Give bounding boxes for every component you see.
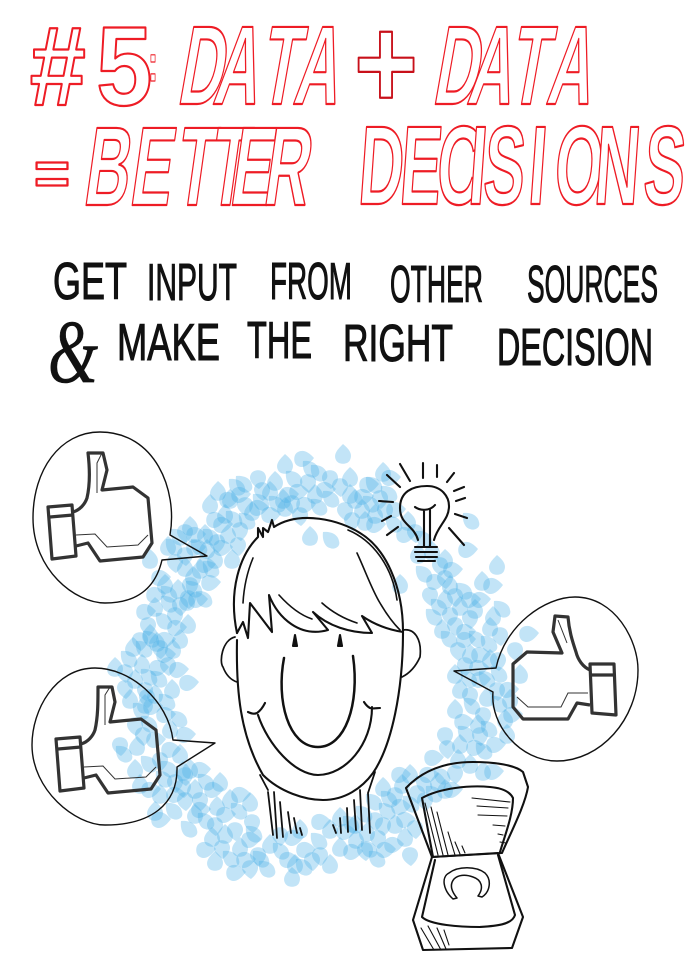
base (413, 853, 523, 950)
title line 1: #5: DATA + DATA: #5 (30, 4, 152, 129)
title line 1: #5: DATA + DATA: : (148, 35, 158, 93)
base logo (444, 868, 489, 899)
collar (260, 772, 375, 838)
subheading line 2 (48, 303, 653, 402)
subheading line 2: RIGHT (343, 315, 453, 373)
mouth (282, 656, 355, 747)
blue petal halo (107, 444, 539, 887)
speech bubble: right thumbs up (454, 597, 638, 761)
subheading line 1: INPUT (147, 254, 237, 312)
subheading line 2: THE (247, 312, 312, 370)
hatching (425, 798, 510, 855)
subheading line 1: OTHER (390, 256, 483, 314)
subheading line 1: GET (53, 253, 127, 311)
head outline (237, 632, 403, 800)
icon: thumbs up (48, 453, 152, 561)
eyes (293, 635, 342, 646)
top bowl (406, 762, 528, 857)
title line 2: = BETTER DECISIONS (34, 104, 690, 230)
subheading (48, 253, 658, 402)
subheading line 2: & (48, 303, 98, 402)
speech bubble: top left thumbs up (33, 432, 207, 603)
subheading line 2: MAKE (117, 314, 220, 372)
title line 2: = BETTER DECISIONS: DECISIONS (355, 104, 690, 229)
title line 2: = BETTER DECISIONS: BETTER (78, 105, 320, 230)
icon: scale / blender (406, 762, 528, 950)
title line 1: #5: DATA + DATA: DATA (172, 4, 354, 128)
title line 1: #5: DATA + DATA (30, 0, 607, 136)
title line 2: = BETTER DECISIONS: = (34, 140, 70, 207)
icon: lightbulb (379, 463, 467, 561)
icon: thumbs up (56, 687, 160, 793)
ears (221, 630, 420, 682)
title line 1: #5: DATA + DATA: DATA (427, 4, 607, 128)
hair (234, 518, 403, 633)
icon: thumbs up (513, 616, 616, 719)
speech bubble: lower left thumbs up (32, 668, 215, 825)
title (30, 0, 690, 230)
person: smiling face (221, 518, 420, 838)
subheading line 1: FROM (270, 253, 352, 311)
subheading line 1 (53, 253, 658, 314)
